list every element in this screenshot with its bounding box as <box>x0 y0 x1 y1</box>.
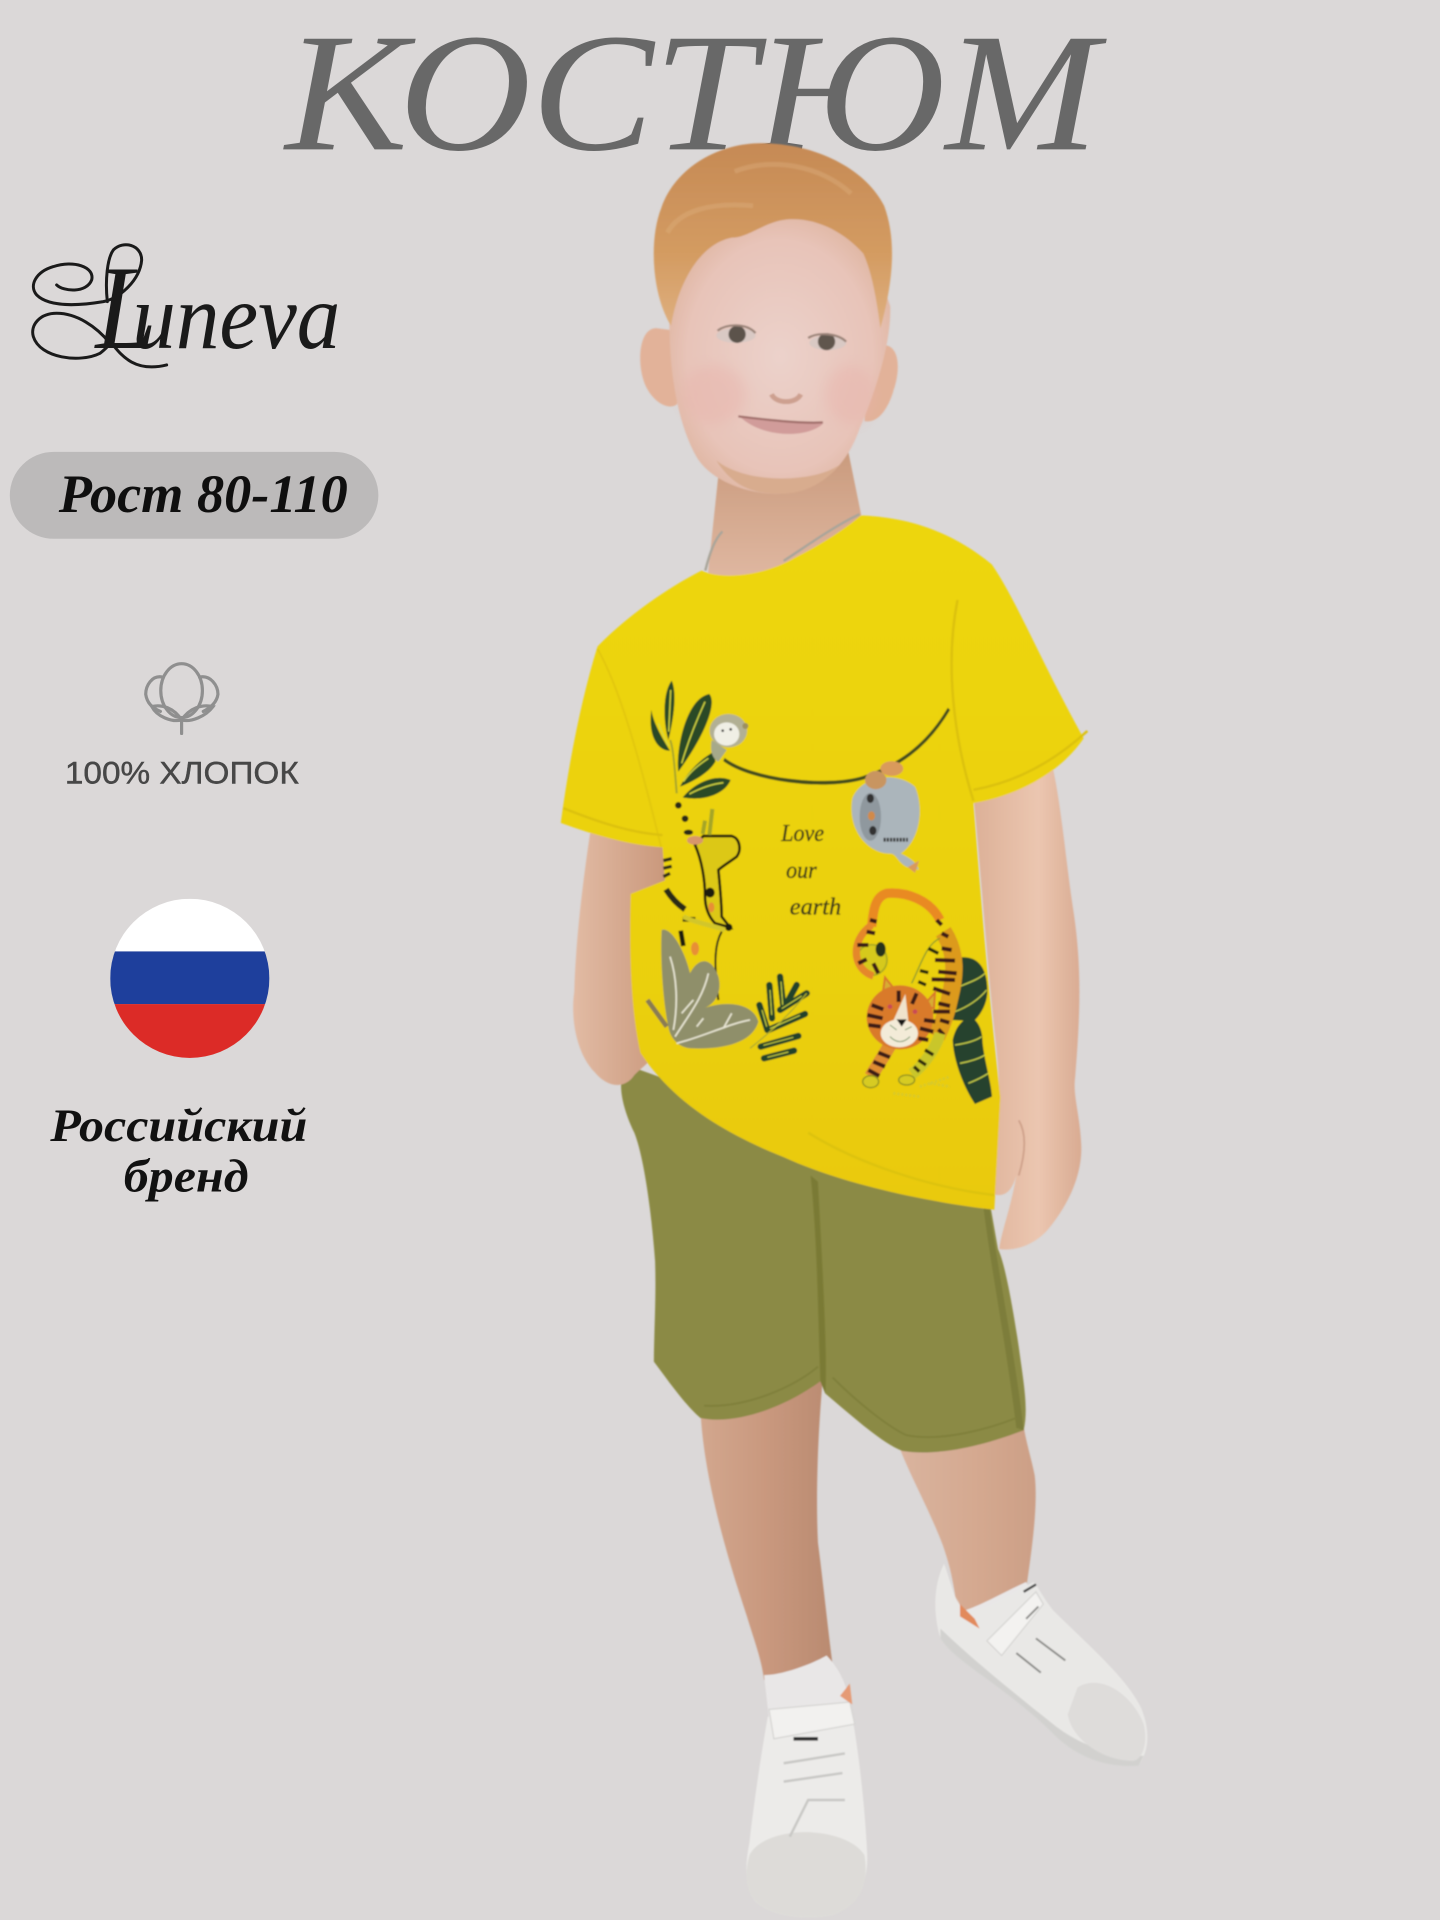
print: tiger small text marks <box>893 1077 950 1097</box>
print: slogan: our <box>786 857 817 884</box>
mouth <box>738 416 823 434</box>
logo: Luneva <box>33 241 340 374</box>
height badge <box>10 452 378 539</box>
face <box>669 218 890 494</box>
print: dark palm <box>750 977 807 1058</box>
print: olive leaves <box>647 930 758 1048</box>
print: rope and sloth <box>724 709 949 873</box>
print: plants, monkey and giraffe <box>647 681 807 1058</box>
brand note <box>49 1101 307 1202</box>
icon: cotton boll <box>146 664 218 733</box>
shorts <box>621 1065 1026 1452</box>
left shoe <box>746 1684 867 1917</box>
nose <box>771 394 801 402</box>
logo: Luneva: uneva <box>132 266 340 369</box>
right shoe <box>935 1564 1147 1766</box>
neck <box>705 447 862 583</box>
print: palm leaves <box>651 681 731 799</box>
print: monstera leaf <box>951 957 992 1104</box>
print: tiger <box>856 893 957 1088</box>
eyes <box>716 325 846 350</box>
print: slogan <box>780 820 841 921</box>
height badge: Рост 80-110 <box>58 464 348 524</box>
title: КОСТЮМ <box>283 0 1107 186</box>
ears <box>640 328 898 421</box>
left arm and hand <box>573 833 667 1085</box>
t-shirt <box>561 516 1087 1210</box>
brand note: бренд <box>124 1151 249 1202</box>
print: slogan: Love <box>780 820 824 847</box>
brand note: Российский <box>49 1101 307 1152</box>
logo: Luneva: L <box>94 241 157 374</box>
socks <box>764 1580 1035 1719</box>
cotton label: 100% ХЛОПОК <box>65 755 299 791</box>
right arm and hand <box>973 759 1081 1249</box>
print: monkey <box>710 714 748 762</box>
print: giraffe <box>663 802 740 1000</box>
legs <box>700 1378 1036 1680</box>
hair <box>654 143 892 328</box>
print: tiger and monstera <box>856 893 992 1104</box>
icon: russian flag <box>110 899 269 1058</box>
boy photo illustration <box>561 143 1147 1917</box>
print: slogan: earth <box>790 894 841 921</box>
